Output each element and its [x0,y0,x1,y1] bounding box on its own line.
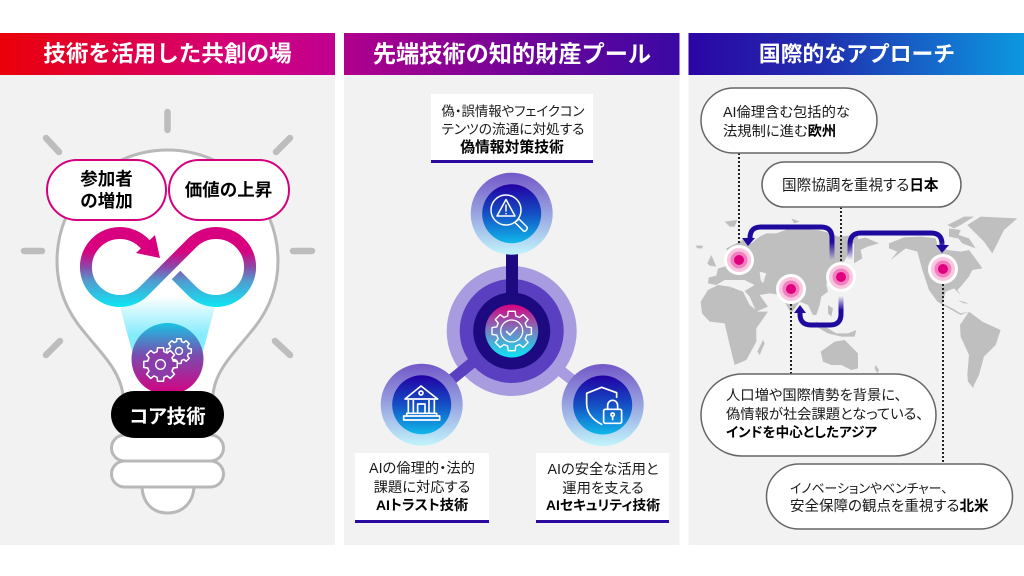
text box: disinformation technology: 偽・誤情報やフェイクコン [441,104,585,119]
heading: IP pool [344,33,680,75]
callout: North America: イノベーションやベンチャー、 [790,481,948,496]
callout: India: 人口増や国際情勢を背景に、 [726,387,902,404]
icon: infinity loop [86,233,250,301]
text box: disinformation technology: テンツの流通に対処する [442,122,584,137]
marker: Europe [724,245,754,275]
connector: left [440,358,478,389]
panel: co-creation [0,33,335,545]
pill: value: 価値の上昇 [185,180,272,200]
text box: AI trust technology [355,453,489,523]
text box: disinformation technology: 偽情報対策技術 [460,138,564,156]
pill: value [169,160,289,220]
arrow: Japan to India [794,296,841,325]
callout: India: インドを中心としたアジア [726,424,877,440]
callout: Europe: AI倫理含む包括的な [723,104,850,121]
hub [440,250,577,396]
callout: Europe [701,88,877,153]
text box: AI trust technology: AIの倫理的・法的 [369,460,475,477]
heading: co-creation: 技術を活用した共創の場 [43,42,292,66]
text box: AI trust technology: AIトラスト技術 [376,497,468,514]
light beam [117,296,218,362]
world map [695,217,1017,388]
pill: participants [47,160,166,220]
heading: IP pool: 先端技術の知的財産プール [373,41,651,67]
callout: Japan [762,162,961,207]
arrow: Japan to North America [850,233,949,260]
callout: Japan: 国際協調を重視する日本 [782,177,939,194]
heading: co-creation [0,33,335,75]
node: disinformation [471,173,553,255]
callout: Europe: 法規制に進む欧州 [723,123,836,140]
text box: disinformation technology [431,94,593,163]
text box: AI security technology: AIセキュリティ技術 [546,497,660,513]
pill: participants: 参加者 [80,169,133,189]
callout: India [701,374,936,456]
icon: check gear [492,311,531,351]
label: core technology [111,391,224,438]
text box: AI security technology: 運用を支える [562,480,644,497]
connector: right [552,364,590,394]
callout: India: 偽情報が社会課題となっている、 [726,406,924,423]
marker: India [776,274,806,304]
icon: light bulb [57,150,278,513]
text box: AI security technology: AIの安全な活用と [547,461,659,478]
text box: AI security technology [536,453,669,523]
connector: top [506,250,518,300]
panel: advanced technology pool [344,33,680,545]
dotted leaders [739,153,943,464]
node: AI security [562,364,644,446]
marker: Japan [826,262,856,292]
pill: participants: の増加 [80,191,133,211]
node: AI trust [381,364,463,446]
icon: light rays [24,112,312,355]
callout: North America [766,464,1012,529]
callout: North America: 安全保障の観点を重視する北米 [790,498,989,515]
icon: core gears [132,323,204,395]
icon: shield lock [587,387,622,424]
text box: AI trust technology: 課題に対応する [374,479,470,496]
heading: international: 国際的なアプローチ [759,42,955,66]
marker: North America [928,254,958,284]
label: core technology: コア技術 [129,405,206,428]
panel: international approach [688,33,1024,545]
arrow: Japan to Europe [742,227,832,260]
heading: international [688,33,1024,75]
icon: magnifier warning [491,195,527,231]
icon: bank [404,386,440,420]
